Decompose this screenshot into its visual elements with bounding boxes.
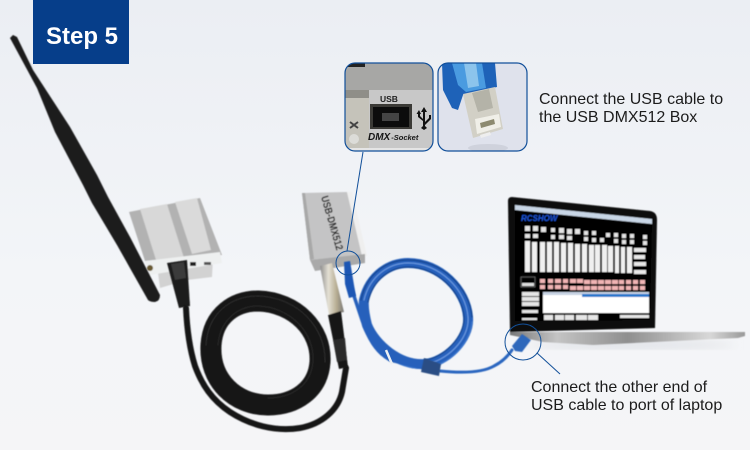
laptop usb plug — [512, 334, 531, 352]
caption: laptop connection: USB cable to port of laptop — [531, 397, 722, 414]
step badge — [33, 0, 129, 64]
inset: usb port on box — [345, 63, 433, 151]
software logo: RCSHOW — [521, 214, 559, 223]
port label: USB — [380, 94, 398, 104]
left control panel — [522, 292, 539, 320]
callout: laptop port circle — [505, 324, 560, 374]
red button panel — [521, 277, 645, 290]
black dmx cable coil — [186, 296, 346, 429]
cable tie — [386, 350, 392, 364]
caption: usb box connection: the USB DMX512 Box — [539, 109, 697, 126]
laptop shadow — [525, 342, 735, 348]
side buttons — [634, 248, 646, 274]
port opening — [370, 104, 412, 129]
xlr connector on usb box — [320, 263, 348, 369]
blue usb cable — [352, 260, 512, 372]
antenna — [10, 35, 160, 302]
ferrite bead — [421, 358, 441, 376]
usb-dmx512 box — [302, 192, 367, 271]
bottom buttons — [544, 315, 649, 320]
caption: usb box connection: Connect the USB cable to — [539, 91, 723, 108]
usb b plug — [344, 261, 356, 298]
laptop — [508, 197, 745, 348]
laptop base — [510, 332, 745, 345]
button grid — [525, 226, 647, 245]
faders — [525, 241, 632, 273]
inset: usb b plug — [438, 63, 527, 152]
laptop lid — [508, 197, 657, 332]
box label: USB-DMX512 — [318, 195, 345, 252]
step badge: Step 5 — [46, 23, 118, 50]
xlr connector on wireless box — [167, 260, 190, 308]
caption: laptop connection: Connect the other end of — [531, 379, 707, 396]
wireless DMX box — [129, 198, 222, 288]
socket label: DMX-Socket — [368, 132, 419, 143]
software screen — [515, 205, 652, 321]
usb symbol — [416, 107, 431, 130]
cue list — [543, 292, 649, 313]
callout: box port circle — [336, 152, 363, 275]
